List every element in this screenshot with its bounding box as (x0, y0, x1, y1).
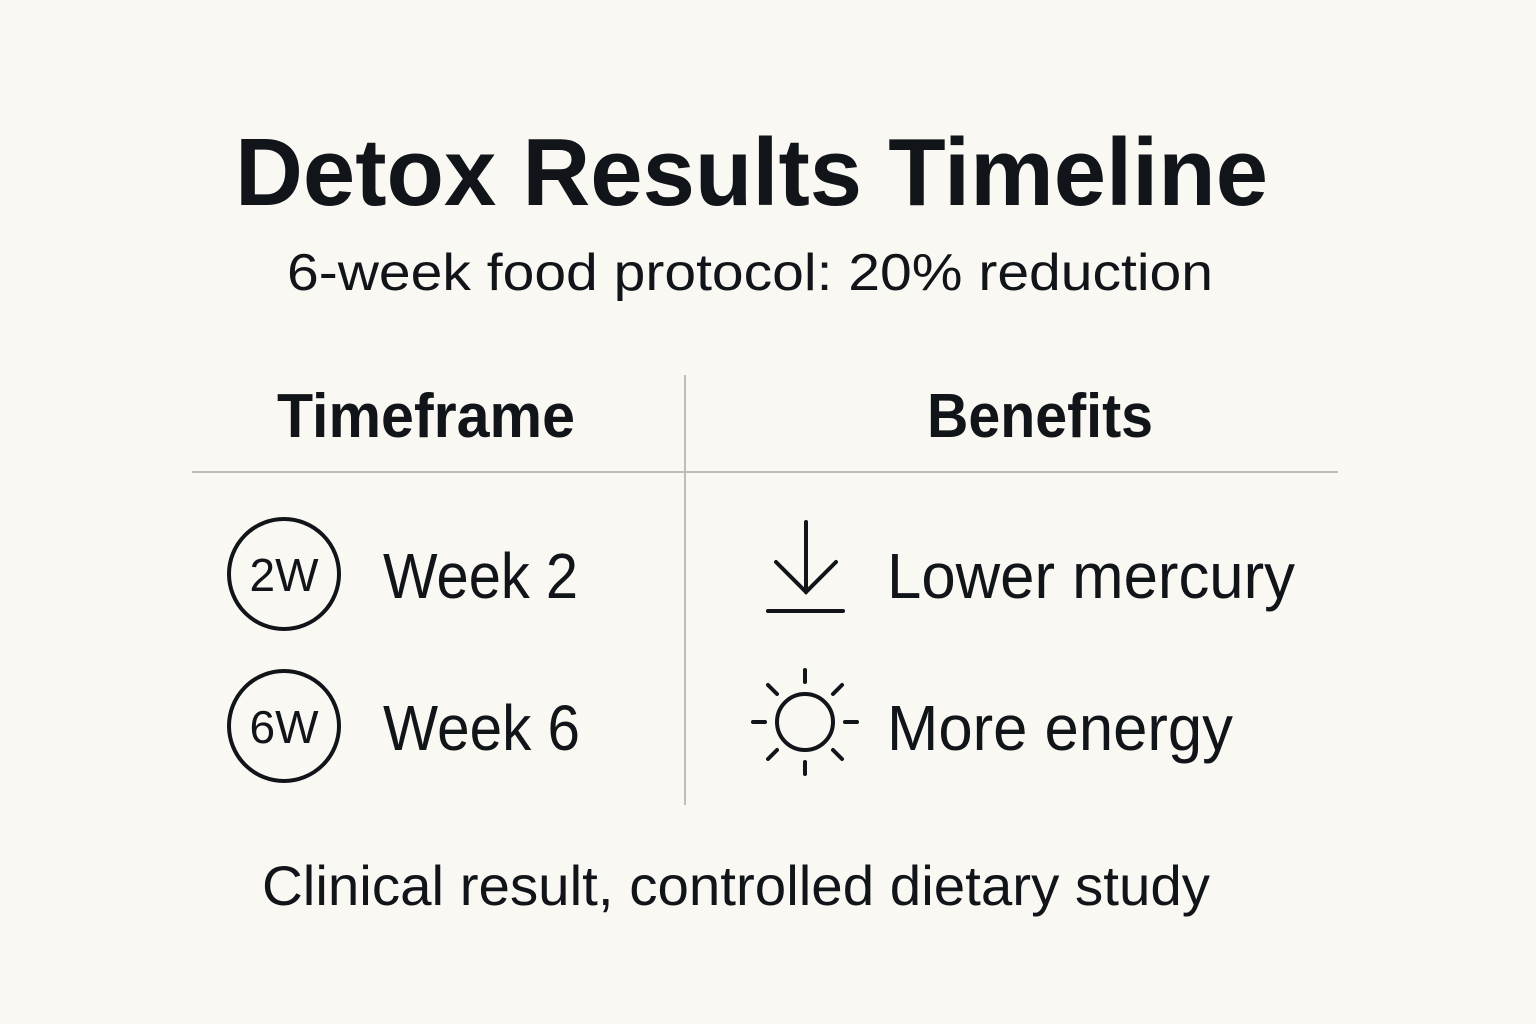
benefit: lower mercury (768, 522, 1295, 612)
header: Benefits: Benefits (927, 382, 1153, 451)
row: week 6 (229, 671, 580, 781)
icon: 2W circle: 2W (250, 549, 319, 601)
header: Timeframe: Timeframe (277, 382, 575, 451)
icon: 6W circle (229, 671, 339, 781)
icon: 2W circle (229, 519, 339, 629)
label: More energy: More energy (887, 692, 1233, 764)
footer note: Clinical result, controlled dietary study (262, 854, 1210, 917)
label: Lower mercury: Lower mercury (887, 540, 1295, 612)
subtitle: 6-week food protocol: 20% reduction (287, 244, 1213, 302)
label: Week 6: Week 6 (383, 692, 580, 764)
label: Week 2: Week 2 (383, 540, 578, 612)
title: Detox Results Timeline (235, 119, 1268, 226)
row: week 2 (229, 519, 578, 629)
icon: down arrow (768, 522, 843, 611)
icon: 6W circle: 6W (250, 701, 319, 753)
benefit: more energy (753, 670, 1233, 774)
icon: sun (753, 670, 857, 774)
